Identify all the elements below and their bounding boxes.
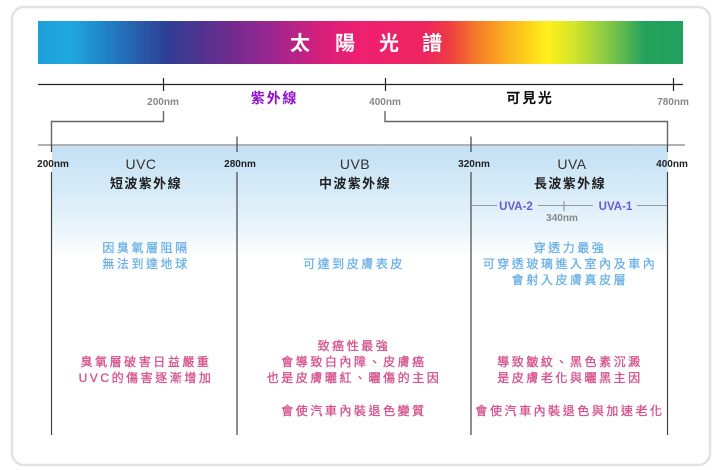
text: UVB pink notes xyxy=(267,338,441,418)
heading: short wave: 短波紫外線 xyxy=(110,176,182,191)
title: solar spectrum: 光 xyxy=(379,32,399,55)
sky gradient background xyxy=(52,146,668,258)
wavelength axis: full spectrum: 400nm xyxy=(369,97,401,108)
text: UVC blue note: 因臭氧層阻隔 xyxy=(102,240,190,255)
text: UVB blue note: 可達到皮膚表皮 xyxy=(303,256,405,271)
text: UVC pink note: 臭氧層破害日益嚴重 xyxy=(81,354,211,369)
heading: UVB: UVB xyxy=(340,156,370,172)
text: UVB pink notes: 會導致白內障、皮膚癌 xyxy=(281,354,427,369)
UVA subdivision scale: UVA-1 xyxy=(599,201,633,213)
column: UVB xyxy=(267,156,441,418)
text: UVC blue note xyxy=(102,240,190,271)
title: solar spectrum: 太 xyxy=(290,32,310,55)
text: UVB pink notes: 也是皮膚曬紅、曬傷的主因 xyxy=(267,370,441,385)
ultraviolet band axis: 400nm xyxy=(656,159,688,170)
column: UVA xyxy=(471,156,667,418)
ultraviolet band axis: 320nm xyxy=(458,159,490,170)
title: solar spectrum: 陽 xyxy=(335,32,355,55)
wavelength axis: full spectrum: 780nm xyxy=(657,97,689,108)
text: UVA pink notes: 是皮膚老化與曬黑主因 xyxy=(497,370,643,385)
heading: UVA: UVA xyxy=(557,156,587,172)
ultraviolet band axis: 200nm xyxy=(37,159,69,170)
UVA subdivision scale: 340nm xyxy=(546,213,578,224)
text: UVA pink notes xyxy=(475,355,665,418)
zoom bracket: ultraviolet range xyxy=(52,111,164,146)
heading: long wave: 長波紫外線 xyxy=(534,176,606,191)
heading: medium wave: 中波紫外線 xyxy=(319,176,391,191)
label: ultraviolet: 紫外線 xyxy=(251,90,298,106)
ultraviolet band axis: 280nm xyxy=(224,159,256,170)
text: UVA pink notes: 導致皺紋、黑色素沉澱 xyxy=(497,355,643,369)
spectrum bar with title xyxy=(38,21,683,64)
wavelength axis: full spectrum xyxy=(38,78,689,108)
ultraviolet band axis xyxy=(37,136,688,435)
text: UVA pink notes: 會使汽車內裝退色與加速老化 xyxy=(475,403,665,418)
text: UVA blue note: 穿透力最強 xyxy=(534,240,606,255)
text: UVB pink notes: 會使汽車內裝退色變質 xyxy=(281,403,427,418)
text: UVC blue note: 無法到達地球 xyxy=(102,256,190,271)
text: UVB pink notes: 致癌性最強 xyxy=(318,338,390,353)
title: solar spectrum: 譜 xyxy=(422,32,442,55)
wavelength axis: full spectrum: 200nm xyxy=(147,97,179,108)
heading: UVC: UVC xyxy=(125,156,157,172)
UVA subdivision scale: UVA-2 xyxy=(499,201,533,213)
text: UVA blue note: 會射入皮膚真皮層 xyxy=(512,272,628,287)
text: UVC pink note: UVC的傷害逐漸增加 xyxy=(79,370,213,385)
zoom bracket: right side xyxy=(385,111,668,146)
text: UVA blue note: 可穿透玻璃進入室內及車內 xyxy=(483,256,657,271)
UVA subdivision scale xyxy=(471,201,667,224)
text: UVC pink note xyxy=(79,354,213,385)
title: solar spectrum xyxy=(290,32,442,55)
column: UVC xyxy=(79,156,213,385)
text: UVA blue note xyxy=(483,240,657,287)
label: visible light: 可見光 xyxy=(506,90,554,106)
